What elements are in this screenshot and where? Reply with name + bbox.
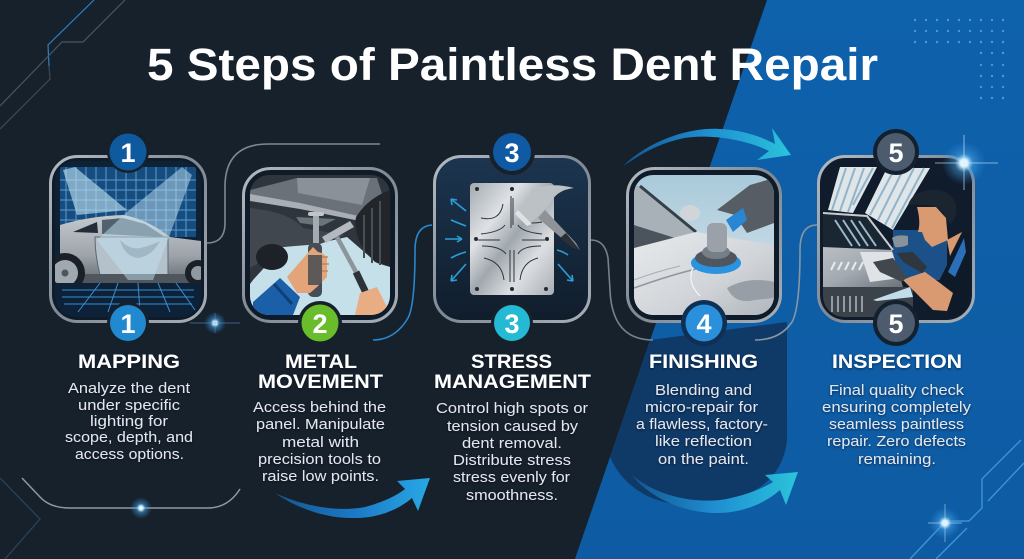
panel: step 5 inspection <box>818 156 974 322</box>
step 2 text <box>253 351 386 485</box>
circuit lines bottom-right <box>910 440 1024 559</box>
star glow: bottom right <box>928 504 962 542</box>
body: mapping: lighting for <box>90 414 168 430</box>
heading: metal movement: METAL <box>285 351 357 373</box>
body: mapping <box>65 381 193 463</box>
badge: step 3 bottom: 3 <box>504 309 520 339</box>
badge: step 5 top: 5 <box>888 138 904 168</box>
body: stress management: smoothness. <box>466 488 558 504</box>
badge: step 3 top <box>489 129 535 175</box>
heading: finishing: FINISHING <box>649 351 758 373</box>
connector: bottom glowing line <box>22 478 240 508</box>
circuit lines top-left <box>0 0 125 129</box>
body: finishing: Blending and <box>655 383 752 399</box>
badge: step 5 bottom: 5 <box>888 309 904 339</box>
body: finishing <box>636 383 768 468</box>
badge: step 1 bottom <box>107 302 149 344</box>
heading: stress management: MANAGEMENT <box>434 371 591 393</box>
illustration: polisher on car hood <box>634 175 774 315</box>
illustration: technician inspecting car <box>823 167 970 317</box>
body: metal movement: Access behind the <box>253 400 386 416</box>
badge: step 1 top: 1 <box>120 138 136 168</box>
body: inspection: remaining. <box>858 452 936 468</box>
body: stress management: stress evenly for <box>453 470 570 486</box>
heading: stress management: STRESS <box>471 351 552 373</box>
body: metal movement <box>253 400 386 485</box>
heading: metal movement: MOVEMENT <box>258 371 383 393</box>
badge: step 5 top <box>873 129 919 175</box>
badge: step 2 <box>298 301 342 345</box>
illustration: hands with tools under car <box>250 175 390 315</box>
body: stress management: Control high spots or <box>436 401 588 417</box>
body: inspection <box>822 383 972 468</box>
body: finishing: a flawless, factory- <box>636 417 768 433</box>
body: stress management: tension caused by <box>447 419 579 435</box>
star glow: mapping <box>190 312 240 334</box>
heading: inspection: INSPECTION <box>832 351 962 373</box>
body: inspection: repair. Zero defects <box>827 434 966 450</box>
body: stress management <box>436 401 588 504</box>
dark blue blob behind step 4 <box>610 322 787 505</box>
step 4 text <box>636 351 768 468</box>
badge: step 3 top: 3 <box>504 138 520 168</box>
body: finishing: on the paint. <box>658 452 749 468</box>
badge: step 3 bottom <box>491 302 533 344</box>
body: metal movement: raise low points. <box>262 469 379 485</box>
panel: step 3 stress management <box>434 156 590 322</box>
panel: step 4 finishing <box>628 168 780 322</box>
star glow: bottom line <box>130 497 152 519</box>
icon: hammer <box>515 185 580 250</box>
badge: step 1 bottom: 1 <box>120 309 136 339</box>
illustration: metal plate <box>470 183 554 295</box>
badge: step 5 bottom <box>873 300 919 346</box>
step 5 text <box>822 351 972 468</box>
connector: step 1 to step 2 <box>207 144 380 243</box>
background blue diagonal panel <box>575 0 1024 559</box>
badge: step 4: 4 <box>696 309 712 339</box>
icon: stress arrows <box>445 199 573 281</box>
badge: step 1 top <box>107 131 149 173</box>
body: inspection: ensuring completely <box>822 400 972 416</box>
arrow: top curved <box>623 128 791 166</box>
body: finishing: micro-repair for <box>645 400 758 416</box>
body: metal movement: precision tools to <box>258 452 381 468</box>
heading: stress management <box>434 351 591 393</box>
badge: step 2: 2 <box>312 309 328 339</box>
body: metal movement: metal with <box>282 435 359 451</box>
dot grid top-right <box>914 19 1004 99</box>
body: finishing: like reflection <box>655 434 752 450</box>
arrow: finishing to inspection <box>632 472 798 513</box>
body: inspection: seamless paintless <box>829 417 964 433</box>
panel: step 2 metal movement <box>244 168 396 322</box>
arrow: metal movement to stress management <box>275 478 430 518</box>
body: inspection: Final quality check <box>829 383 965 399</box>
body: mapping: scope, depth, and <box>65 430 193 446</box>
heading: metal movement <box>258 351 383 393</box>
connector: step 3 to step 4 <box>591 240 653 340</box>
star glow: inspection card <box>935 135 998 190</box>
illustration: car under lights <box>55 161 201 317</box>
body: stress management: dent removal. <box>462 436 562 452</box>
step 3 text <box>434 351 591 504</box>
connector: step 2 to step 3 <box>373 225 432 340</box>
heading: mapping: MAPPING <box>78 351 180 373</box>
body: mapping: Analyze the dent <box>68 381 190 397</box>
body: metal movement: panel. Manipulate <box>256 417 385 433</box>
body: mapping: under specific <box>78 398 180 414</box>
step 1 text <box>65 351 193 463</box>
body: stress management: Distribute stress <box>453 453 571 469</box>
chevron lines bottom-left <box>0 478 40 559</box>
body: mapping: access options. <box>75 447 184 463</box>
panel: step 1 mapping <box>45 156 211 322</box>
connector: step 4 to step 5 <box>755 225 817 340</box>
badge: step 4 <box>681 300 727 346</box>
title: 5 Steps of Paintless Dent Repair <box>147 39 878 90</box>
